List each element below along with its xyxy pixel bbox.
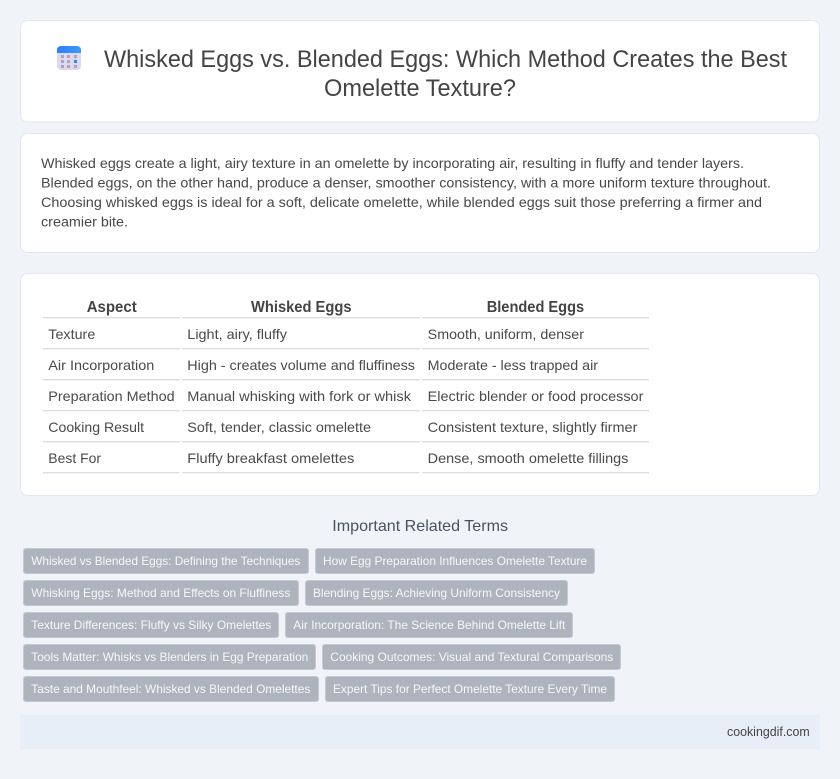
title bbox=[104, 46, 787, 102]
table header row: Blended Eggs bbox=[487, 299, 584, 316]
table header row: Whisked Eggs bbox=[251, 299, 352, 316]
table row: texture: Light, airy, fluffy bbox=[187, 326, 287, 342]
text block: introduction paragraph: creamier bite. bbox=[41, 214, 128, 230]
table row: air incorporation: Moderate - less trapped air bbox=[428, 357, 598, 373]
table row: best for: Best For bbox=[48, 450, 101, 466]
footer bar bbox=[20, 715, 820, 749]
tag bbox=[24, 676, 318, 702]
table row: cooking result bbox=[43, 419, 649, 442]
table row: air incorporation: Air Incorporation bbox=[48, 357, 154, 373]
tag bbox=[24, 612, 278, 638]
heading: important related terms: Important Related Terms bbox=[332, 518, 508, 535]
table row: texture: Texture bbox=[48, 326, 96, 342]
table row: cooking result: Consistent texture, slightly firmer bbox=[428, 419, 638, 435]
tag: Taste and Mouthfeel: Whisked vs Blended Omelettes bbox=[31, 682, 310, 696]
tag: Blending Eggs: Achieving Uniform Consistency bbox=[313, 586, 560, 600]
panel: introduction bbox=[20, 134, 820, 252]
table header row: Aspect bbox=[87, 299, 137, 316]
tag bbox=[24, 644, 316, 670]
table row: texture: Smooth, uniform, denser bbox=[428, 326, 584, 342]
tag: Whisked vs Blended Eggs: Defining the Techniques bbox=[31, 554, 300, 568]
text block: introduction paragraph: Whisked eggs create a light, airy texture in an omelette by incorporating air, resulting in fluffy and tender layers. bbox=[41, 155, 744, 171]
title: Whisked Eggs vs. Blended Eggs: Which Method Creates the Best bbox=[104, 46, 787, 73]
tag bbox=[286, 612, 572, 638]
tag bbox=[326, 676, 614, 702]
panel: comparison table bbox=[20, 274, 820, 496]
tag bbox=[316, 548, 594, 574]
table row: preparation method: Preparation Method bbox=[48, 388, 175, 404]
tag bbox=[24, 548, 308, 574]
table row: texture bbox=[43, 326, 649, 349]
table row: preparation method: Electric blender or food processor bbox=[428, 388, 644, 404]
tag bbox=[322, 644, 620, 670]
table row: air incorporation bbox=[43, 357, 649, 380]
text block: introduction paragraph bbox=[41, 155, 771, 230]
panel: title card bbox=[20, 20, 820, 122]
tag: Expert Tips for Perfect Omelette Texture Every Time bbox=[333, 682, 607, 696]
icon: calendar bbox=[57, 46, 81, 70]
table row: best for bbox=[43, 450, 649, 473]
table row: cooking result: Soft, tender, classic omelette bbox=[187, 419, 371, 435]
table row: best for: Dense, smooth omelette fillings bbox=[428, 450, 628, 466]
tag list: related terms bbox=[24, 548, 620, 702]
tag: How Egg Preparation Influences Omelette Texture bbox=[323, 554, 587, 568]
title: Omelette Texture? bbox=[324, 75, 516, 102]
tag: Tools Matter: Whisks vs Blenders in Egg Preparation bbox=[31, 650, 308, 664]
tag: Air Incorporation: The Science Behind Omelette Lift bbox=[293, 618, 566, 632]
tag bbox=[24, 580, 298, 606]
text block: introduction paragraph: Blended eggs, on the other hand, produce a denser, smoother consistency, with a more uniform texture throughout. bbox=[41, 174, 771, 190]
table row: preparation method: Manual whisking with fork or whisk bbox=[187, 388, 412, 404]
table row: cooking result: Cooking Result bbox=[48, 419, 144, 435]
tag bbox=[306, 580, 568, 606]
table row: best for: Fluffy breakfast omelettes bbox=[187, 450, 354, 466]
table header row bbox=[43, 299, 649, 318]
tag: Texture Differences: Fluffy vs Silky Omelettes bbox=[31, 618, 271, 632]
footer source text: cookingdif.com bbox=[727, 724, 810, 739]
tag: Whisking Eggs: Method and Effects on Fluffiness bbox=[31, 586, 290, 600]
table row: preparation method bbox=[43, 388, 649, 411]
text block: introduction paragraph: Choosing whisked eggs is ideal for a soft, delicate omelette, while blended eggs suit those preferring a firmer and bbox=[41, 194, 762, 210]
table row: air incorporation: High - creates volume and fluffiness bbox=[187, 357, 415, 373]
tag: Cooking Outcomes: Visual and Textural Comparisons bbox=[330, 650, 613, 664]
